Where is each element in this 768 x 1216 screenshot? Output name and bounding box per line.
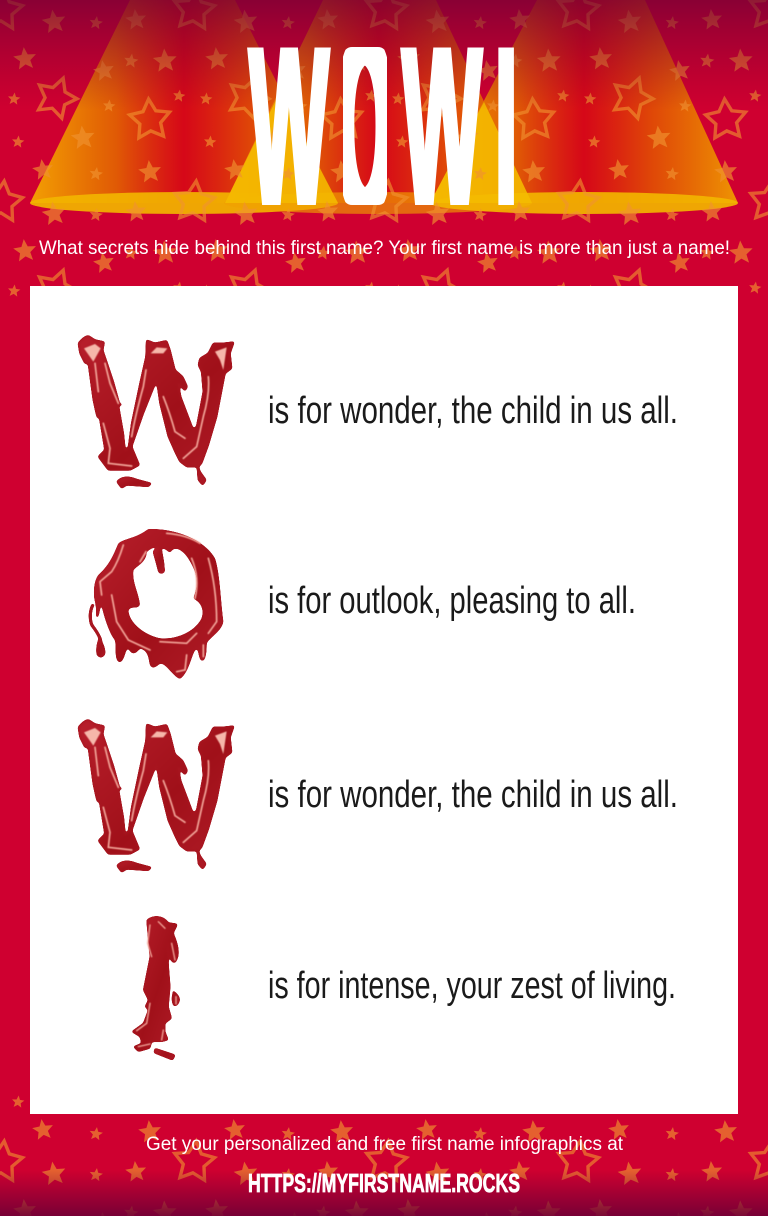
icon: blood letter W bbox=[78, 336, 234, 488]
icon: blood letter W second bbox=[78, 720, 234, 872]
row: W wonder bbox=[78, 336, 678, 488]
icon: blood letter O bbox=[90, 529, 223, 679]
spotlights bbox=[30, 0, 738, 214]
icon: blood letter I bbox=[132, 917, 180, 1060]
footer url: HTTPS://MYFIRSTNAME.ROCKS bbox=[248, 1168, 520, 1198]
overlap: left bbox=[225, 92, 338, 203]
row: I intense bbox=[132, 917, 676, 1060]
title: W bbox=[249, 0, 329, 254]
top shade bbox=[0, 0, 768, 110]
footer text: Get your personalized and free first name infographics at bbox=[146, 1134, 624, 1155]
subtitle: What secrets hide behind this first name? Your first name is more than just a name! bbox=[39, 237, 730, 259]
row: O outlook bbox=[90, 529, 636, 679]
spotlight: left bbox=[30, 0, 338, 214]
title: W bbox=[402, 0, 482, 254]
bottom shade bbox=[0, 1170, 768, 1216]
text: O line: is for outlook, pleasing to all. bbox=[268, 580, 636, 622]
overlap: right bbox=[430, 102, 532, 203]
row: W wonder second bbox=[78, 720, 678, 872]
title bbox=[247, 47, 514, 205]
spotlight: middle bbox=[224, 0, 532, 214]
panel: white card bbox=[30, 286, 738, 1114]
spotlight: right bbox=[430, 0, 738, 214]
title: I bbox=[495, 0, 517, 254]
